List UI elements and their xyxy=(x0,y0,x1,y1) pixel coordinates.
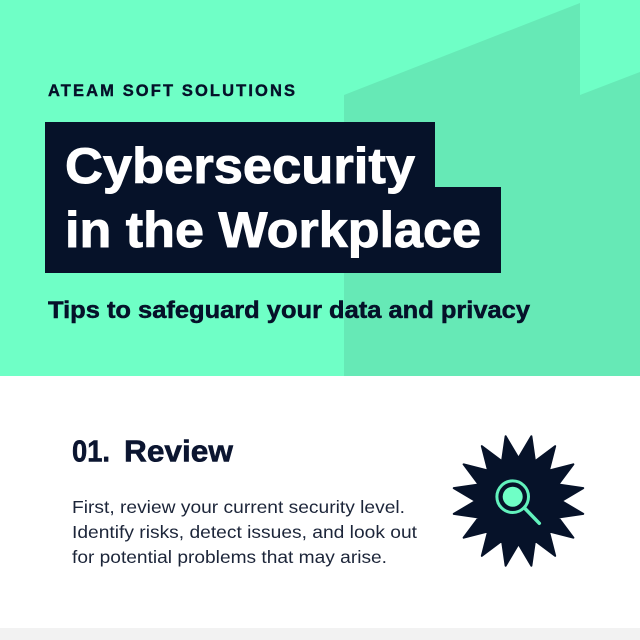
section heading: 01 Review: Review xyxy=(124,434,234,468)
icon: magnifier in starburst xyxy=(454,436,583,566)
company name: ATEAM SOFT SOLUTIONS xyxy=(48,82,295,100)
subtitle: Tips to safeguard your data and privacy xyxy=(48,297,531,324)
section heading: 01 Review: 01. xyxy=(72,434,110,468)
header panel xyxy=(0,0,640,376)
section body text: for potential problems that may arise. xyxy=(72,547,387,567)
title block xyxy=(45,122,501,273)
section heading: 01 Review xyxy=(72,434,234,468)
section body text: First, review your current security level. xyxy=(72,497,405,517)
section body text: Identify risks, detect issues, and look out xyxy=(72,522,417,542)
title line 2: in the Workplace xyxy=(65,202,481,258)
next section strip xyxy=(0,628,640,640)
title line 1: Cybersecurity xyxy=(65,138,415,194)
decorative background shape xyxy=(344,3,640,376)
section body text xyxy=(72,497,417,567)
